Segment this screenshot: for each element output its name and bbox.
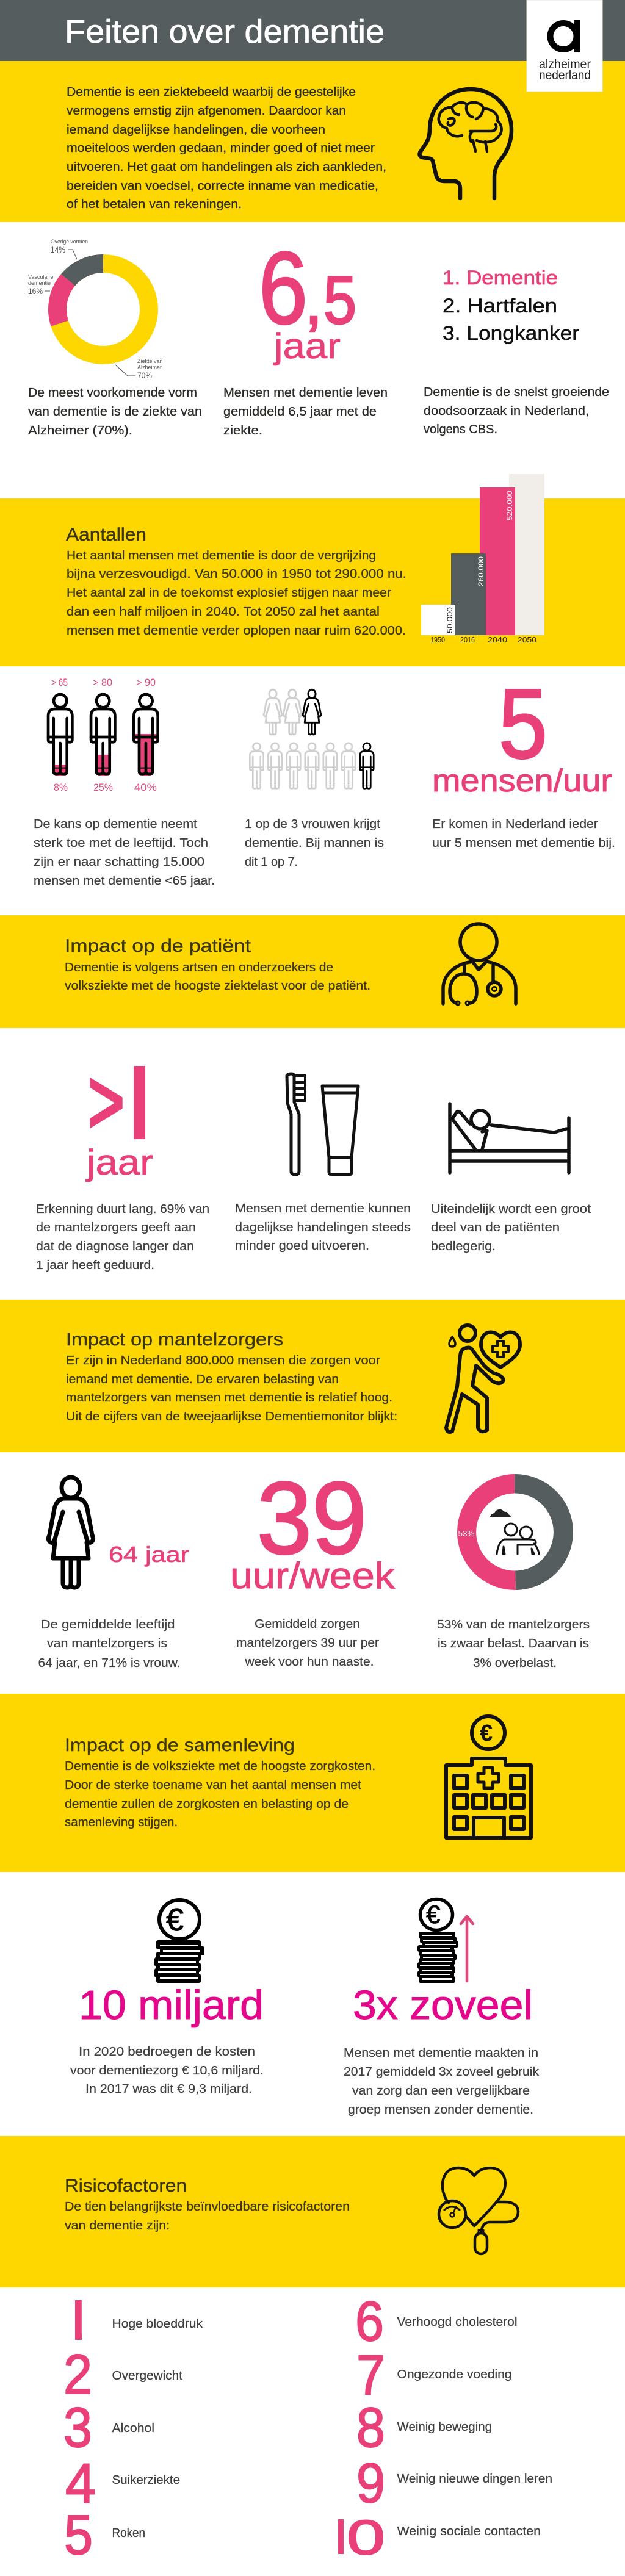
caption: leeftijd: 64 jaar, en 71% is vrouw. [38,1657,181,1670]
stat: 39 uur/week: 39 [257,1461,367,1575]
icon: ziekenhuis met euro: € [480,1721,493,1746]
stat: 10 miljard: 10 miljard [79,1982,264,2028]
panel: aantallen [0,498,625,666]
donut chart: vormen van dementie: Overige vormen [51,239,88,245]
item 7: Ongezonde voeding [397,2368,511,2381]
donut chart: vormen van dementie: Vasculaire [28,274,53,280]
item 9 [356,2452,552,2514]
text block: Dementie is volgens artsen en onderzoekers de [65,961,333,974]
stat: 5 mensen/uur: 5 [499,669,547,779]
icon: stapel munten: € [166,1902,184,1938]
stat: meer dan 1 jaar [85,1066,153,1182]
bar chart: aantallen per jaar: 2016 [460,635,475,644]
panel: impact op mantelzorgers [0,1300,625,1452]
caption: uren per week: mantelzorgers 39 uur per [236,1636,379,1650]
caption: handelingen [235,1202,411,1253]
item 3: Alcohol [112,2422,154,2435]
item 10: 0 [347,2510,385,2564]
caption: vormen: Alzheimer (70%). [28,424,132,437]
bar chart: aantallen per jaar: 520.000 [505,491,514,520]
caption: mensen per uur [432,818,615,850]
caption: kans: sterk toe met de leeftijd. Toch [34,836,208,850]
text block [65,961,370,993]
intro text: Dementie is een ziektebeeld waarbij de geestelijke [67,85,356,99]
item 3 [63,2397,154,2459]
donut chart: vormen van dementie [28,239,163,380]
item 7 [356,2344,511,2406]
caption: handelingen: Mensen met dementie kunnen [235,1202,411,1215]
icon: twee personen [497,1524,539,1554]
caption: vrouwen en mannen: 1 op de 3 vrouwen krijgt [245,818,380,831]
bar chart: aantallen per jaar: 260.000 [477,556,485,586]
item 1: Hoge bloeddruk [112,2317,203,2331]
item 8 [356,2397,492,2459]
icon: mantelzorger met hart [446,1325,520,1432]
item 1 [75,2300,203,2340]
caption: handelingen: dagelijkse handelingen steeds [235,1221,411,1234]
pictogram: kans per leeftijd [48,677,158,793]
donut chart: vormen van dementie: dementie [28,280,51,286]
panel: impact op de samenleving [0,1694,625,1872]
item 4: 4 [65,2453,96,2515]
item 2: 2 [63,2344,92,2406]
caption: doodsoorzaak: volgens CBS. [424,423,497,436]
heading: Aantallen [66,525,146,545]
text block [65,1760,375,1829]
caption: vormen: De meest voorkomende vorm [28,386,197,400]
caption: leeftijd: De gemiddelde leeftijd [40,1618,175,1632]
caption: handelingen: minder goed uitvoeren. [235,1239,369,1253]
text block: De tien belangrijkste beïnvloedbare risicofactoren [65,2200,350,2214]
intro text [67,85,386,211]
pictogram: kans per leeftijd: > 65 [51,677,68,688]
caption: levensduur: ziekte. [223,424,262,437]
intro text: bereiden van voedsel, correcte inname van medicatie, [67,179,378,193]
text block: Er zijn in Nederland 800.000 mensen die zorgen voor [66,1354,380,1367]
stat: 5 mensen/uur: mensen/uur [432,763,612,799]
text block [67,549,406,638]
stat: 6,5 jaar: jaar [273,326,341,366]
icon: hart met bloeddrukmeter [439,2168,518,2254]
item 2: Overgewicht [112,2369,182,2383]
donut chart: vormen van dementie: 16% [28,286,43,296]
icon: stapel munten met pijl: € [426,1900,440,1929]
intro text: moeiteloos werden gedaan, minder goed of niet meer [67,142,375,155]
item 5: Roken [112,2527,145,2540]
caption: zorggebruik: groep mensen zonder dementie. [348,2103,533,2117]
item 4: Suikerziekte [112,2473,180,2487]
item 8: 8 [356,2397,385,2459]
caption: leeftijd: van mantelzorgers is [47,1637,167,1650]
intro text: of het betalen van rekeningen. [67,198,242,211]
pictogram: 1 op 3 vrouwen, 1 op 7 mannen [250,689,374,788]
item 1: 1 [61,2288,93,2353]
icon: tandenborstel en tube [287,1074,358,1175]
icon: arts met stethoscoop [443,924,516,1005]
panel: risicofactoren [0,2136,625,2287]
caption: zorggebruik [344,2046,540,2117]
caption: kans: zijn er naar schatting 15.000 [34,855,204,869]
stat: 6,5 jaar: 6 [259,231,308,345]
caption: vrouwen en mannen [245,818,384,869]
logo: alzheimer [539,57,591,71]
caption: kosten [70,2045,264,2096]
donut chart: vormen van dementie: Ziekte van [137,358,163,364]
panel: intro [0,61,625,222]
pictogram: kans per leeftijd: > 80 [93,677,112,688]
item 6: Verhoogd cholesterol [397,2315,518,2329]
caption: kans [34,818,215,888]
text block: Het aantal mensen met dementie is door de vergrijzing [67,549,376,563]
donut chart: vormen van dementie: 70% [137,370,152,380]
donut chart: vormen van dementie: Alzheimer [137,364,162,370]
text block: Dementie is de volksziekte met de hoogste zorgkosten. [65,1760,375,1773]
donut chart: 53% zwaar belast [457,1474,573,1590]
stat: meer dan 1 jaar: jaar [85,1143,153,1182]
item 10: Weinig sociale contacten [397,2525,541,2538]
bar chart: aantallen per jaar: 1950 [430,635,445,644]
item 2 [63,2344,182,2406]
caption: belasting: 3% overbelast. [473,1657,557,1670]
ranking: doodsoorzaken: 1. Dementie [443,267,558,289]
caption: belasting: is zwaar belast. Daarvan is [438,1637,589,1650]
icon: wolk [490,1509,511,1517]
caption: uren per week: week voor hun naaste. [244,1655,374,1669]
text block: dementie zullen de zorgkosten en belasting op de [65,1797,349,1811]
stat: 6,5 jaar: , [305,268,322,337]
caption: mensen per uur: Er komen in Nederland ieder [432,818,598,831]
caption: belasting [437,1618,590,1670]
caption: uren per week [236,1617,379,1669]
donut chart: vormen van dementie: 14% [51,245,65,254]
text block: Door de sterke toename van het aantal mensen met [65,1779,361,1792]
item 8: Weinig beweging [397,2420,492,2434]
text block: van dementie zijn: [65,2219,170,2232]
caption: erkenning: de mantelzorgers geeft aan [36,1221,196,1234]
header bar [0,0,625,61]
item 10: 1 [326,2508,354,2565]
caption: mensen per uur: uur 5 mensen met dementie bij. [432,836,615,850]
item 9: Weinig nieuwe dingen leren [397,2472,552,2486]
text block [66,1354,397,1423]
caption: belasting: 53% van de mantelzorgers [437,1618,590,1632]
bar chart: aantallen per jaar: 2050 [518,635,536,644]
text block: dan een half miljoen in 2040. Tot 2050 zal het aantal [67,605,380,619]
item 5: 5 [64,2504,93,2566]
stat: 39 uur/week: uur/week [230,1555,396,1596]
stat: 6,5 jaar [259,231,356,366]
pictogram: kans per leeftijd: 40% [134,782,157,793]
icon: bedlegerige patient [450,1104,569,1173]
caption: kosten: voor dementiezorg € 10,6 miljard. [70,2064,264,2078]
text block: mensen met dementie verder oplopen naar ruim 620.000. [67,624,406,638]
ranking: doodsoorzaken: 3. Longkanker [443,322,579,344]
caption: kosten: In 2020 bedroegen de kosten [79,2045,255,2059]
intro text: vermogens ernstig zijn afgenomen. Daardoor kan [67,104,346,118]
text block: bijna verzesvoudigd. Van 50.000 in 1950 tot 290.000 nu. [67,567,406,581]
item 3: 3 [63,2397,92,2459]
caption: zorggebruik: Mensen met dementie maakten in [344,2046,538,2060]
stat: meer dan 1 jaar: > [88,1050,125,1153]
logo: nederland [539,68,591,82]
icon: vrouw, 64 jaar: 64 jaar [109,1542,189,1567]
caption: bedlegerig: bedlegerig. [431,1240,496,1253]
caption: leeftijd [38,1618,181,1670]
caption: vormen [28,386,202,437]
text block: Het aantal zal in de toekomst explosief stijgen naar meer [67,586,391,600]
caption: levensduur [223,386,388,437]
list: risicofactoren rechts [338,2301,552,2555]
icon: head with brain [420,89,511,198]
icon: stapel munten [154,1900,204,1983]
stat: 5 mensen/uur [432,669,612,799]
donut chart: 53% zwaar belast: 53% [458,1529,475,1538]
caption: bedlegerig [431,1203,591,1253]
item 5 [64,2504,145,2566]
text block: Uit de cijfers van de tweejaarlijkse Dementiemonitor blijkt: [66,1410,397,1423]
item 7: 7 [356,2344,385,2406]
text block: mantelzorgers van mensen met dementie is relatief hoog. [66,1391,392,1405]
ranking: doodsoorzaken [443,267,579,344]
caption: kans: mensen met dementie <65 jaar. [34,874,215,888]
heading: Impact op de patiënt [65,936,251,956]
icon: logo mark [551,20,580,52]
caption: erkenning: 1 jaar heeft geduurd. [36,1259,154,1272]
caption: vormen: van dementie is de ziekte van [28,405,202,419]
bar chart: aantallen per jaar: 2040 [488,635,507,644]
heading: Risicofactoren [65,2176,187,2196]
caption: zorggebruik: van zorg dan een vergelijkbare [352,2084,530,2098]
caption: erkenning: dat de diagnose langer dan [36,1240,194,1253]
stat: 39 uur/week [230,1461,396,1596]
text block: volksziekte met de hoogste ziektelast voor de patiënt. [65,979,370,993]
heading: Impact op mantelzorgers [66,1329,283,1350]
item 10 [338,2519,540,2555]
list: risicofactoren links [65,2300,203,2555]
caption: doodsoorzaak: Dementie is de snelst groeiende [424,386,609,399]
stat: meer dan 1 jaar: 1 [107,1043,167,1162]
caption: erkenning: Erkenning duurt lang. 69% van [36,1203,209,1216]
arrow: omhoog [461,1916,473,1981]
item 4 [65,2453,180,2515]
text block: iemand met dementie. De ervaren belasting van [66,1373,339,1386]
caption: doodsoorzaak: doodsoorzaak in Nederland, [424,405,589,418]
intro text: uitvoeren. Het gaat om handelingen als zich aankleden, [67,160,386,174]
text block: samenleving stijgen. [65,1816,178,1829]
title: Feiten over dementie [65,13,385,50]
icon: stapel munten met pijl [417,1899,473,1983]
caption: bedlegerig: Uiteindelijk wordt een groot [431,1203,591,1216]
ranking: doodsoorzaken: 2. Hartfalen [443,295,557,317]
item 6: 6 [355,2290,384,2353]
icon: ziekenhuis met euro [446,1716,531,1838]
caption: bedlegerig: deel van de patiënten [431,1221,560,1234]
pictogram: kans per leeftijd: 8% [54,782,68,793]
caption: zorggebruik: 2017 gemiddeld 3x zoveel gebruik [344,2065,540,2079]
bar chart: aantallen per jaar [421,474,544,644]
pictogram: kans per leeftijd: > 90 [136,677,156,688]
caption: kans: De kans op dementie neemt [34,818,197,831]
caption: erkenning [36,1203,209,1272]
bar chart: aantallen per jaar: 50.000 [446,607,454,633]
heading: Impact op de samenleving [65,1735,295,1755]
caption: doodsoorzaak [424,386,609,436]
caption: kosten: In 2017 was dit € 9,3 miljard. [85,2082,252,2096]
pictogram: kans per leeftijd: 25% [93,782,113,793]
panel: impact op de patient [0,915,625,1028]
stat: 3x zoveel: 3x zoveel [353,1982,533,2028]
caption: uren per week: Gemiddeld zorgen [255,1617,360,1631]
caption: levensduur: Mensen met dementie leven [223,386,388,400]
logo [527,0,602,92]
caption: vrouwen en mannen: dementie. Bij mannen is [245,836,384,850]
item 9: 9 [356,2452,385,2514]
intro text: iemand dagelijkse handelingen, die voorheen [67,123,325,137]
item 6 [355,2290,518,2353]
icon: vrouw, 64 jaar [48,1477,189,1588]
caption: vrouwen en mannen: dit 1 op 7. [245,855,298,869]
caption: levensduur: gemiddeld 6,5 jaar met de [223,405,377,419]
stat: 6,5 jaar: 5 [323,263,356,338]
text block [65,2200,350,2232]
